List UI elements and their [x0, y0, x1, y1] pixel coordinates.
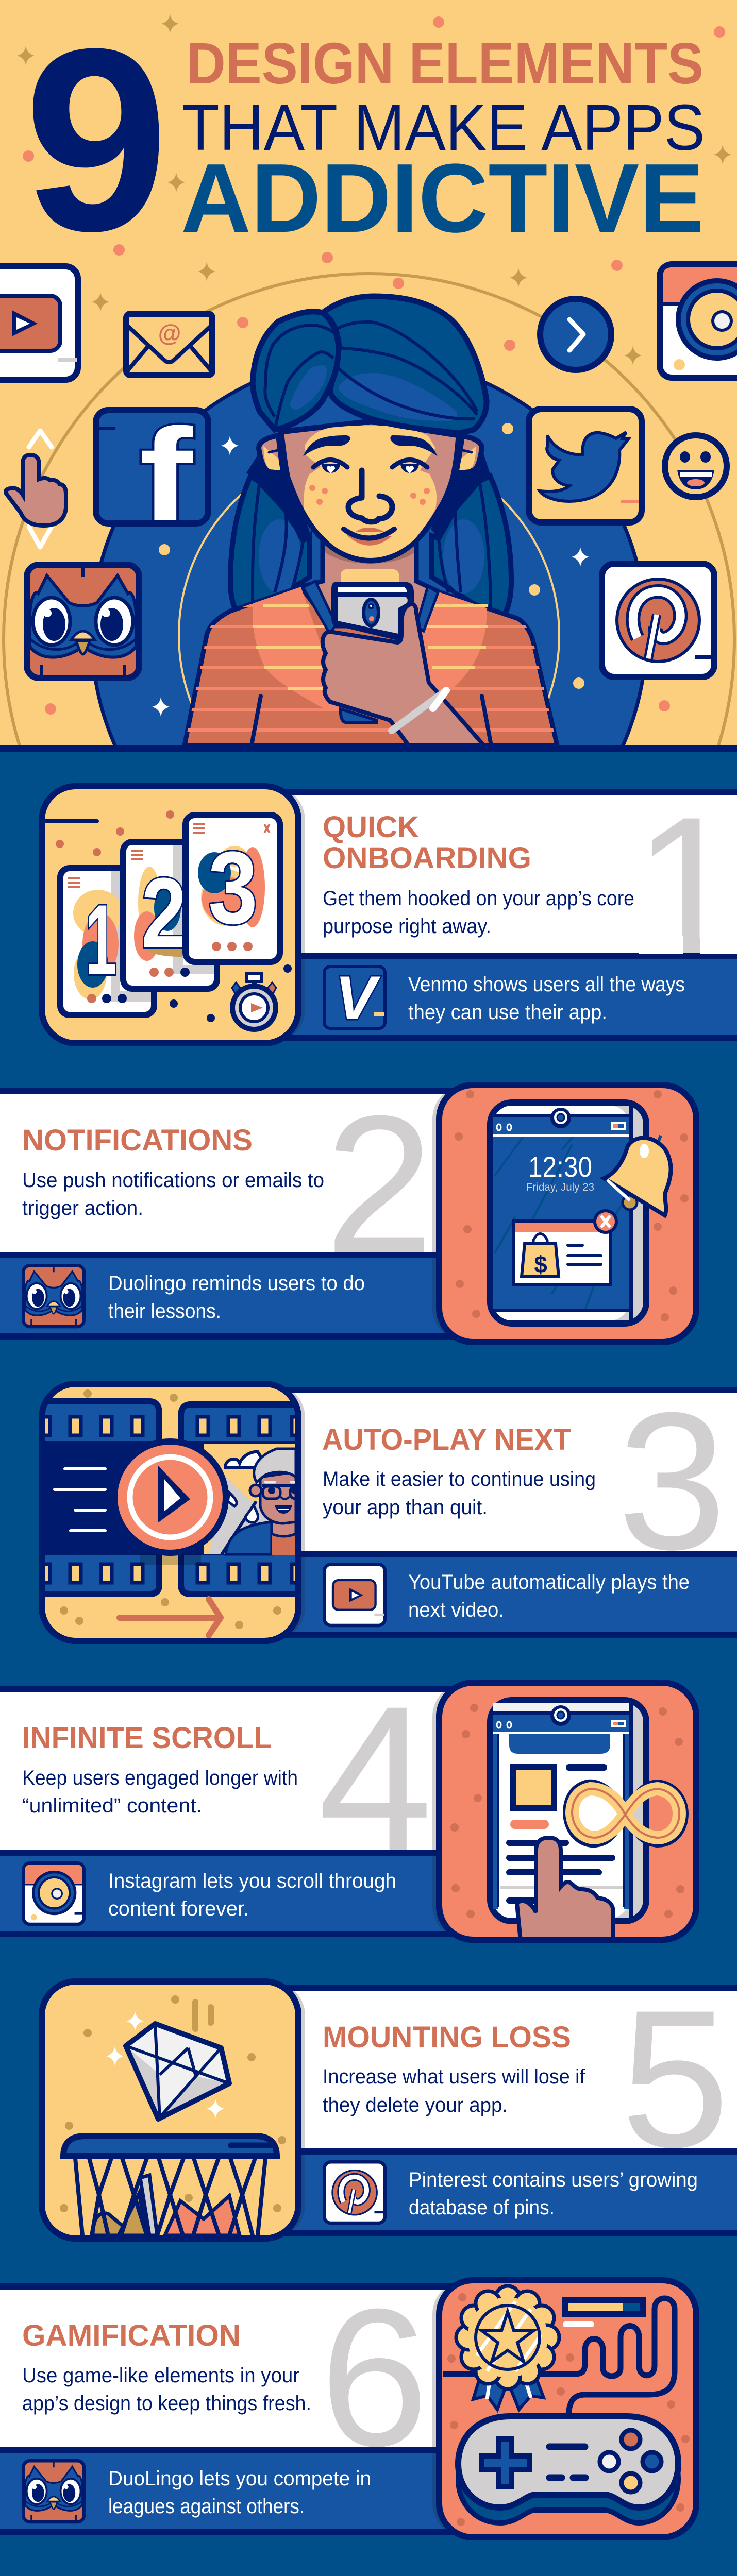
body text: trigger action. — [22, 1197, 143, 1219]
basket contents — [93, 2175, 240, 2235]
icon: Duolingo — [23, 2461, 84, 2522]
icon: Twitter tile — [529, 409, 642, 522]
card: game controller and badge — [439, 2280, 696, 2537]
icon: Pinterest tile — [602, 564, 714, 677]
panel — [48, 786, 737, 1043]
clock: 12:30 — [528, 1150, 592, 1183]
yellow dots and white sparkles on the circle — [152, 423, 589, 717]
icon: next arrow button — [540, 299, 611, 370]
heading: QUICK — [323, 810, 419, 844]
example text: Instagram lets you scroll through — [108, 1870, 396, 1892]
icon: Instagram — [23, 1863, 84, 1924]
heading: NOTIFICATIONS — [22, 1124, 253, 1157]
icon: award rosette — [456, 2286, 559, 2410]
icon: Pinterest — [324, 2162, 385, 2223]
body text: your app than quit. — [323, 1496, 488, 1519]
section 3: auto-play next — [41, 1371, 737, 1641]
phone — [490, 1103, 646, 1324]
speed lines — [55, 1469, 105, 1531]
example text — [108, 1870, 396, 1920]
icon: swipe hand — [6, 431, 66, 547]
body text: purpose right away. — [323, 915, 491, 938]
icon: stopwatch — [230, 974, 278, 1032]
title: DESIGN ELEMENTS — [187, 31, 703, 96]
example text: Duolingo reminds users to do — [108, 1272, 365, 1295]
card: numbered screens — [42, 786, 298, 1043]
example text — [408, 1571, 690, 1621]
body text — [323, 1468, 596, 1519]
numeral 3: 3 — [617, 1371, 727, 1590]
header background — [0, 0, 737, 745]
arrow — [120, 1599, 221, 1635]
body text: Make it easier to continue using — [323, 1468, 596, 1490]
icon: Venmo — [324, 963, 385, 1032]
heading: ONBOARDING — [323, 841, 531, 875]
onboarding screen 2: 2 — [141, 857, 187, 969]
icon: Duolingo owl tile — [27, 565, 139, 678]
example text: leagues against others. — [108, 2495, 305, 2518]
example text — [108, 1272, 365, 1323]
heading: INFINITE SCROLL — [22, 1721, 272, 1755]
icon: diamond — [126, 2024, 229, 2119]
example text: content forever. — [108, 1897, 249, 1920]
ear highlights — [263, 446, 476, 470]
example text — [408, 973, 685, 1024]
numeral 5: 5 — [621, 1969, 730, 2188]
title: ADDICTIVE — [181, 144, 704, 253]
panel — [0, 1683, 690, 1940]
phone — [331, 582, 414, 641]
hair top — [323, 296, 487, 433]
icon: Facebook tile — [96, 401, 208, 549]
coral confetti dots — [23, 16, 725, 715]
example text — [409, 2168, 698, 2219]
icon: YouTube — [324, 1564, 385, 1625]
onboarding screen 2 — [123, 842, 217, 989]
body text — [323, 2065, 585, 2116]
neck — [301, 536, 438, 634]
icon: Venmo: V — [335, 963, 381, 1032]
phone: Friday, July 23 — [526, 1181, 594, 1193]
large blue circle behind the figure — [92, 357, 646, 911]
icon: controller — [458, 2416, 678, 2523]
example text: database of pins. — [409, 2196, 555, 2219]
tan sparkles — [17, 14, 731, 365]
elderly viewer in the video — [209, 1449, 300, 1555]
numeral 6: 6 — [320, 2268, 429, 2487]
title: THAT MAKE APPS — [182, 91, 705, 164]
onboarding screen 1: 1 — [85, 884, 117, 996]
example text: DuoLingo lets you compete in — [108, 2467, 371, 2490]
card: film strip and play button — [41, 1384, 302, 1641]
body text: Use push notifications or emails to — [22, 1169, 324, 1192]
film strip — [41, 1401, 302, 1597]
section 2: notifications — [0, 1075, 696, 1342]
hair side lobe — [253, 312, 339, 430]
card: diamond and basket — [42, 1981, 298, 2239]
body text: app’s design to keep things fresh. — [22, 2392, 311, 2415]
ears — [259, 435, 482, 473]
card: infinite feed — [439, 1683, 696, 1941]
controller cable — [443, 2298, 675, 2415]
play button — [114, 1442, 226, 1553]
heading — [323, 810, 531, 875]
body text: Increase what users will lose if — [323, 2065, 585, 2088]
example text — [108, 2467, 371, 2518]
face — [281, 421, 459, 561]
body text: Use game-like elements in your — [22, 2364, 299, 2387]
example text: Venmo shows users all the ways — [408, 973, 685, 996]
example text: Pinterest contains users’ growing — [409, 2168, 698, 2191]
example text: their lessons. — [108, 1300, 221, 1323]
heading: AUTO-PLAY NEXT — [322, 1423, 571, 1456]
body text — [22, 1767, 298, 1817]
shoulders and striped shirt — [180, 581, 562, 745]
body text: Keep users engaged longer with — [22, 1767, 298, 1789]
section 1: quick onboarding — [42, 776, 737, 1043]
main background — [0, 752, 737, 2576]
notification popup — [513, 1211, 616, 1285]
net — [75, 2158, 265, 2235]
section 6: gamification — [0, 2268, 696, 2537]
body text — [323, 887, 634, 938]
onboarding screen 3: 3 — [208, 831, 258, 945]
notification popup: $ — [534, 1251, 547, 1278]
icon: email envelope — [126, 314, 212, 375]
numeral 2: 2 — [325, 1075, 434, 1294]
hand scrolling — [517, 1838, 613, 1941]
onboarding screen 1 — [60, 868, 154, 1015]
illustration: woman holding a phone — [180, 296, 562, 745]
title number 9: 9 — [24, 0, 169, 285]
header base band — [0, 745, 737, 752]
panel — [0, 1085, 690, 1342]
thin inner arc — [179, 445, 559, 825]
basket rim — [63, 2136, 277, 2156]
phone with feed — [490, 1700, 646, 1941]
section 5: mounting loss — [42, 1969, 737, 2239]
numeral 4: 4 — [318, 1663, 432, 1893]
panel — [48, 1384, 737, 1641]
icon: infinity — [566, 1783, 685, 1844]
icon: laughing emoji — [665, 435, 727, 497]
body text: Get them hooked on your app’s core — [323, 887, 634, 910]
onboarding screen 3 — [186, 815, 280, 962]
body text: they delete your app. — [323, 2094, 508, 2116]
icon: bell — [604, 1136, 671, 1215]
card: lock screen notification — [439, 1085, 696, 1342]
outer tan arc — [4, 274, 734, 1004]
icon: Duolingo — [23, 1265, 84, 1327]
body text: “unlimited” content. — [22, 1794, 202, 1817]
heading: MOUNTING LOSS — [323, 2021, 571, 2054]
panel — [48, 1981, 737, 2239]
game meter — [563, 2300, 643, 2327]
heading: GAMIFICATION — [22, 2319, 241, 2352]
body text — [22, 1169, 324, 1219]
example text: YouTube automatically plays the — [408, 1571, 690, 1594]
icon: email envelope: @ — [158, 319, 181, 346]
long hair, back — [230, 450, 511, 621]
hand holding phone with bracelet — [323, 604, 484, 745]
icon: YouTube tile — [0, 266, 78, 380]
title — [181, 31, 705, 253]
section 4: infinite scroll — [0, 1663, 696, 1941]
panel — [0, 2280, 690, 2537]
example text: they can use their app. — [408, 1001, 607, 1024]
body text — [22, 2364, 311, 2415]
example text: next video. — [408, 1599, 504, 1621]
icon: Instagram tile — [660, 264, 737, 378]
icon: Facebook tile: f — [139, 401, 193, 549]
